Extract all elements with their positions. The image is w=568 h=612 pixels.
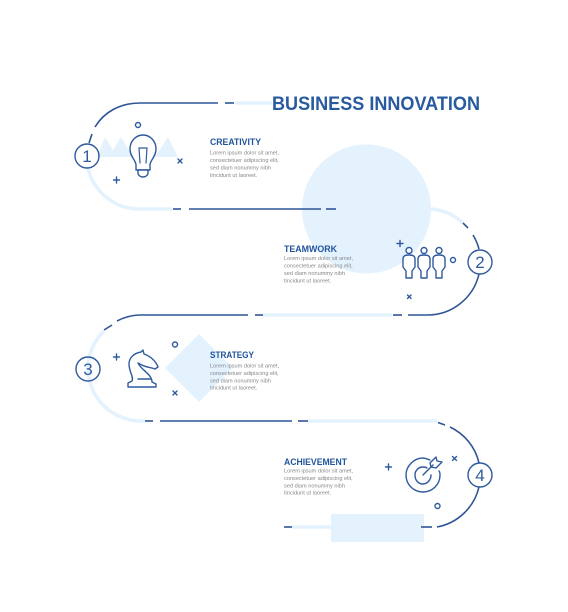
text: creativity: [210, 137, 279, 179]
text: achievement: tincidunt ut laoreet.: [284, 490, 332, 496]
text: teamwork: tincidunt ut laoreet.: [284, 278, 332, 284]
icon: team: [397, 240, 456, 298]
icon: chess knight: [114, 342, 178, 395]
text: achievement: [284, 457, 353, 496]
text: achievement: ACHIEVEMENT: [284, 457, 347, 468]
text: strategy: Lorem ipsum dolor sit amet,: [210, 364, 279, 370]
background shapes: [97, 137, 431, 542]
text: creativity: sed diam nonummy nibh: [210, 166, 271, 172]
text: achievement: consectetuer adipiscing elit,: [284, 476, 353, 482]
text: achievement: sed diam nonummy nibh: [284, 484, 345, 490]
step 2 number: [468, 250, 492, 274]
title: BUSINESS INNOVATION: [272, 94, 480, 115]
text: strategy: consectetuer adipiscing elit,: [210, 371, 279, 377]
icon: target with arrow: [386, 456, 456, 508]
step 3 number: 3: [83, 360, 93, 379]
step 2 number: 2: [475, 253, 485, 272]
winding path: [88, 103, 479, 527]
text: strategy: STRATEGY: [210, 350, 255, 361]
step 4 number: [468, 463, 492, 487]
step 4 number: 4: [475, 466, 485, 485]
text: strategy: sed diam nonummy nibh: [210, 378, 271, 384]
step 1 number: 1: [82, 147, 92, 166]
step 3 number: [76, 357, 100, 381]
text: teamwork: Lorem ipsum dolor sit amet,: [284, 256, 353, 262]
text: achievement: Lorem ipsum dolor sit amet,: [284, 468, 353, 474]
text: creativity: CREATIVITY: [210, 137, 262, 148]
text: creativity: tincidunt ut laoreet.: [210, 173, 258, 179]
icon: light bulb: [114, 122, 182, 183]
text: strategy: tincidunt ut laoreet.: [210, 386, 258, 392]
text: creativity: Lorem ipsum dolor sit amet,: [210, 150, 279, 156]
step 1 number: [75, 144, 99, 168]
text: teamwork: [284, 244, 353, 284]
text: teamwork: sed diam nonummy nibh: [284, 271, 345, 277]
text: creativity: consectetuer adipiscing elit,: [210, 158, 279, 164]
text: teamwork: consectetuer adipiscing elit,: [284, 264, 353, 270]
text: teamwork: TEAMWORK: [284, 244, 337, 255]
text: strategy: [210, 350, 279, 392]
